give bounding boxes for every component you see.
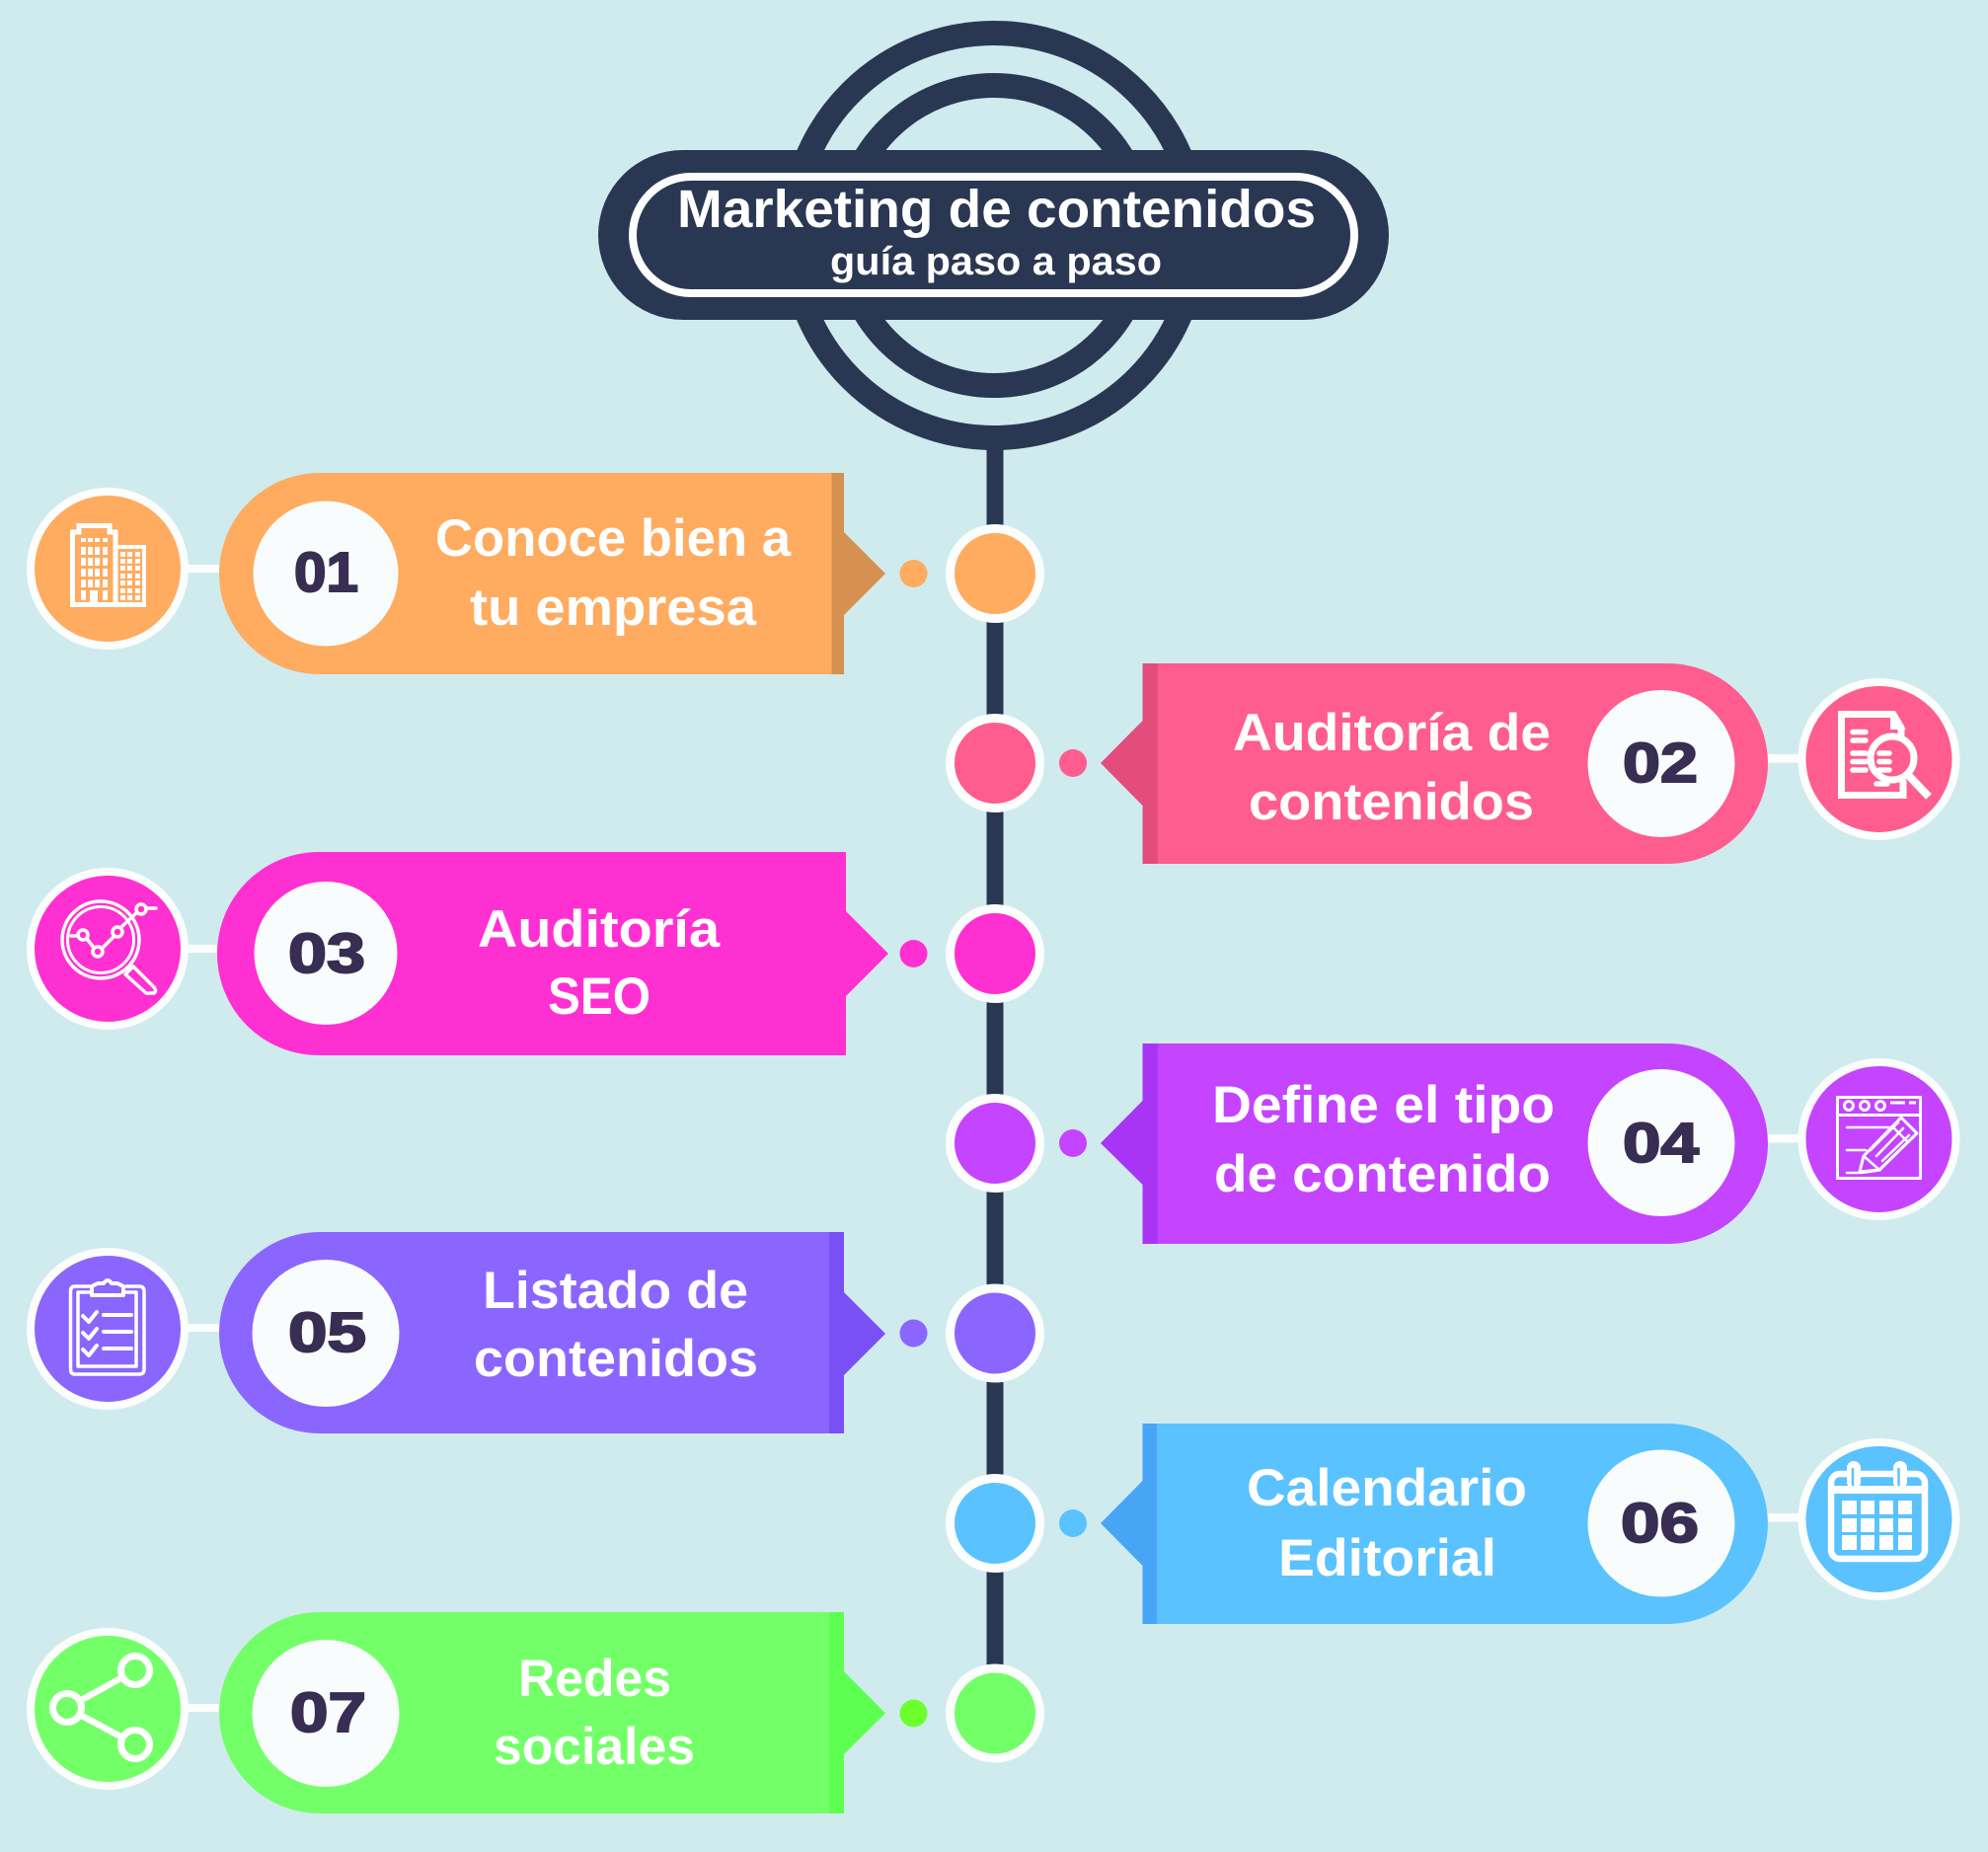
label line 2: SEO bbox=[548, 967, 650, 1026]
connector bbox=[183, 1704, 222, 1712]
timeline node bbox=[950, 529, 1040, 618]
connector bbox=[1762, 1513, 1803, 1522]
number disc bbox=[1587, 690, 1735, 837]
label: Calendario bbox=[1247, 1459, 1527, 1517]
number: 06 bbox=[1621, 1492, 1699, 1555]
title: Marketing de contenidos bbox=[677, 180, 1316, 239]
number: 02 bbox=[1623, 732, 1698, 795]
step 06 bbox=[950, 1424, 1956, 1624]
ribbon bbox=[1143, 1424, 1768, 1624]
number disc bbox=[253, 1640, 399, 1787]
label: Conoce bien a bbox=[435, 509, 792, 568]
ribbon bbox=[1143, 663, 1768, 864]
label line 2: de contenido bbox=[1214, 1145, 1551, 1203]
dot bbox=[900, 560, 928, 587]
ribbon bbox=[219, 473, 844, 674]
dot bbox=[900, 1319, 928, 1347]
ribbon shade and pointer bbox=[1101, 1424, 1157, 1624]
step 05 bbox=[31, 1232, 1040, 1433]
number: 04 bbox=[1623, 1112, 1699, 1175]
label line 2: Editorial bbox=[1278, 1529, 1496, 1587]
step 01 bbox=[31, 473, 1040, 674]
connector bbox=[1762, 1134, 1803, 1143]
dot bbox=[1059, 1129, 1087, 1157]
dot bbox=[1059, 1509, 1087, 1537]
ribbon bbox=[1143, 1043, 1768, 1244]
header badge bbox=[598, 34, 1389, 438]
number disc bbox=[255, 882, 397, 1025]
dot bbox=[900, 1700, 928, 1728]
dot bbox=[1059, 749, 1087, 777]
timeline node bbox=[950, 908, 1040, 999]
ribbon shade and pointer bbox=[1101, 663, 1158, 864]
ribbon shade and pointer bbox=[829, 1232, 885, 1433]
ribbon shade and pointer bbox=[831, 473, 885, 674]
concentric rings bbox=[792, 34, 1196, 438]
number: 03 bbox=[288, 922, 365, 985]
number disc bbox=[253, 1260, 399, 1407]
step 07 bbox=[31, 1612, 1040, 1813]
number disc bbox=[1587, 1449, 1735, 1597]
icon badge: document search bbox=[1802, 682, 1956, 836]
title plate outline bbox=[633, 177, 1354, 293]
number: 05 bbox=[288, 1301, 366, 1364]
icon badge: building bbox=[31, 492, 185, 646]
connector bbox=[183, 945, 222, 953]
step 04 bbox=[950, 1043, 1956, 1244]
timeline node bbox=[950, 1668, 1040, 1758]
connector bbox=[183, 565, 222, 573]
label line 2: contenidos bbox=[474, 1330, 758, 1388]
ribbon shade and pointer bbox=[1101, 1043, 1158, 1244]
icon badge: clipboard bbox=[31, 1252, 185, 1406]
timeline node bbox=[950, 1098, 1040, 1189]
label line 2: tu empresa bbox=[470, 579, 757, 637]
label: Redes bbox=[518, 1650, 671, 1708]
label: Listado de bbox=[483, 1262, 748, 1320]
dot bbox=[900, 940, 928, 967]
ribbon bbox=[219, 1232, 844, 1433]
timeline node bbox=[950, 1288, 1040, 1378]
icon badge: calendar bbox=[1802, 1442, 1956, 1596]
label: Auditoría de bbox=[1233, 704, 1551, 762]
timeline node bbox=[950, 1479, 1040, 1568]
number: 01 bbox=[294, 541, 358, 604]
icon badge: share bbox=[31, 1632, 185, 1786]
timeline node bbox=[950, 719, 1040, 808]
step 02 bbox=[950, 663, 1956, 864]
label line 2: sociales bbox=[494, 1718, 695, 1776]
subtitle: guía paso a paso bbox=[830, 240, 1162, 283]
label line 2: contenidos bbox=[1249, 773, 1534, 831]
icon badge: edit window bbox=[1802, 1062, 1956, 1216]
icon badge: analytics lens bbox=[31, 872, 185, 1026]
ribbon with pointer bbox=[217, 852, 888, 1055]
number disc bbox=[1587, 1069, 1735, 1216]
ribbon shade and pointer bbox=[829, 1612, 885, 1813]
title plate bbox=[598, 150, 1389, 320]
step 03 bbox=[31, 852, 1040, 1055]
timeline stem bbox=[987, 434, 1003, 1678]
connector bbox=[1762, 754, 1803, 762]
number: 07 bbox=[290, 1681, 366, 1744]
label: Define el tipo bbox=[1212, 1076, 1555, 1134]
label: Auditoría bbox=[478, 900, 721, 959]
number disc bbox=[253, 502, 399, 646]
connector bbox=[183, 1324, 222, 1332]
ribbon bbox=[219, 1612, 844, 1813]
